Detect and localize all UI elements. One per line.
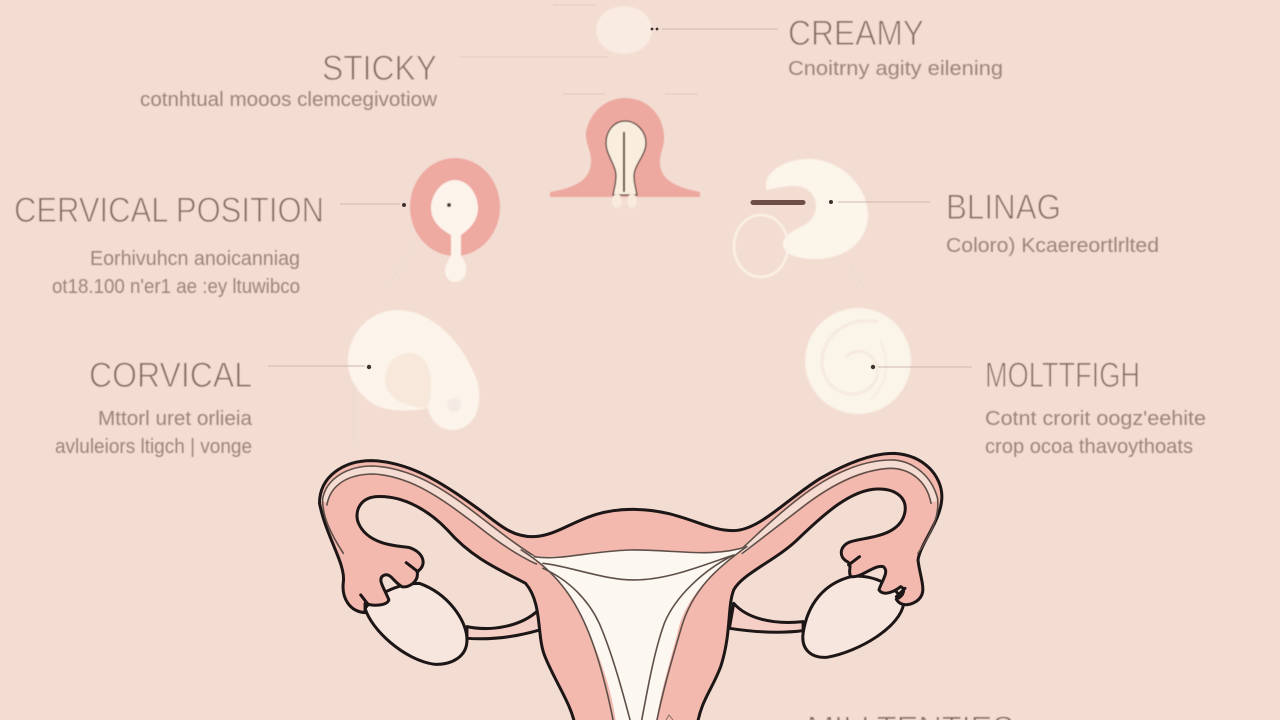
- label: molttigh: Cotnt crorit oogz'eehite: [985, 408, 1206, 430]
- label: corvical: Mttorl uret orlieia: [98, 408, 253, 430]
- uterus body and tubes: [320, 453, 942, 720]
- label: corvical: CORVICAL: [89, 356, 252, 395]
- uterine cavity: [528, 547, 747, 720]
- connector: creamy: [651, 28, 778, 30]
- icon: cervix cross-section: [550, 98, 700, 208]
- fimbria ticks: [361, 557, 905, 603]
- label: corvical: [55, 356, 253, 458]
- left ligament: [467, 610, 540, 639]
- right tube lines: [740, 460, 938, 553]
- right ligament: [729, 603, 803, 632]
- label: sticky: STICKY: [322, 49, 437, 88]
- label: creamy: CREAMY: [788, 14, 924, 53]
- label: creamy: [788, 14, 1003, 80]
- icon: left crescent: [268, 310, 479, 430]
- label: molttigh: crop ocoa thavoythoats: [985, 436, 1193, 458]
- faint connector lines: [354, 5, 865, 445]
- label: sticky: [140, 49, 438, 111]
- left tube highlight: [324, 470, 536, 561]
- icon: cervical ring: [410, 158, 500, 282]
- label: sticky: cotnhtual mooos clemcegivotiow: [140, 89, 438, 111]
- icon: creamy drop: [596, 6, 652, 54]
- label: blinag: [946, 188, 1159, 257]
- left tube inner line: [327, 474, 536, 564]
- label: cervical position: CERVICAL POSITION: [14, 191, 324, 230]
- label: cervical position: Eorhivuhcn anoicanniag: [90, 248, 300, 270]
- label: molttigh: [985, 356, 1206, 458]
- icon: right crescent: [734, 159, 930, 277]
- label: blinag: BLINAG: [946, 188, 1061, 227]
- right tube highlight: [742, 464, 934, 552]
- icon: swirl disc: [805, 308, 972, 414]
- right ovary: [803, 576, 904, 657]
- left tube lines: [323, 466, 536, 557]
- label: molttigh: MOLTTFIGH: [985, 356, 1140, 395]
- label: cervical position: [14, 191, 324, 298]
- connector: cervical position: [340, 203, 406, 207]
- small mark at bottom of uterus: [666, 715, 673, 720]
- label: blinag: Coloro) Kcaereortlrlted: [946, 235, 1159, 257]
- label: creamy: Cnoitrny agity eilening: [788, 58, 1003, 80]
- uterus illustration: [320, 453, 942, 720]
- cavity lines: [521, 547, 747, 720]
- label: corvical: avluleiors ltigch | vonge: [55, 436, 252, 458]
- right tube inner line: [742, 468, 931, 553]
- label: cervical position: ot18.100 n'er1 ae :ey ltuwibco: [52, 276, 300, 298]
- left ovary: [365, 583, 467, 664]
